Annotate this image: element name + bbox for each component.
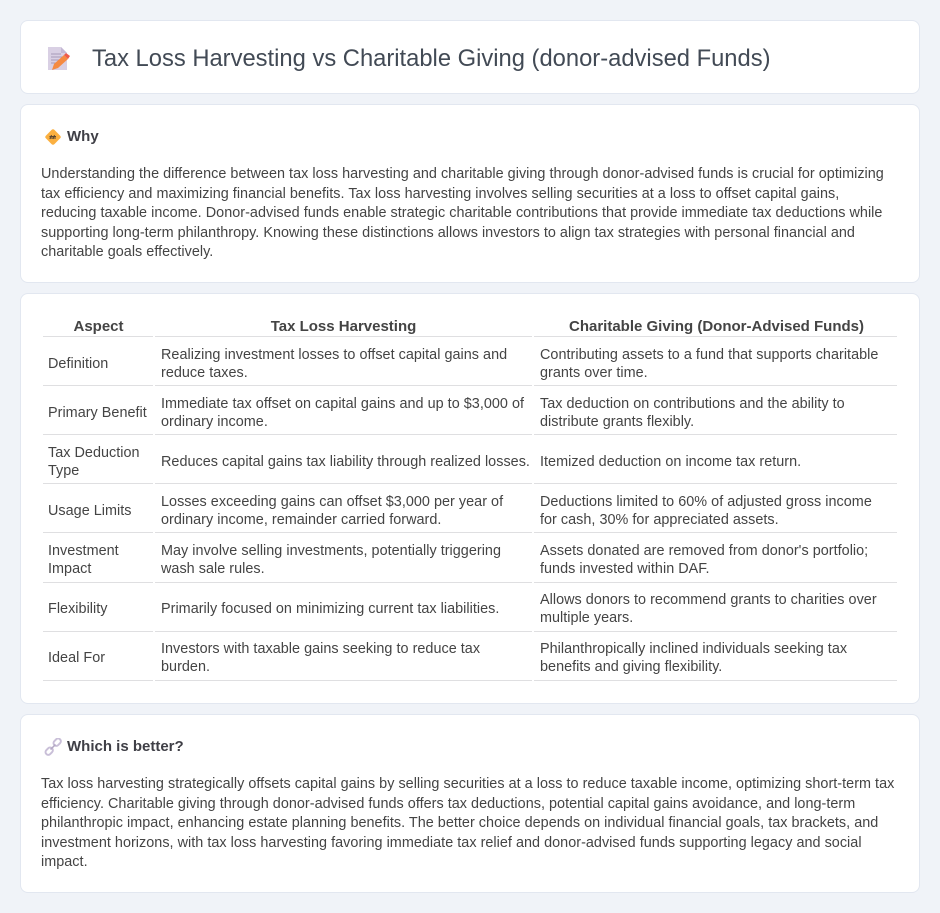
row: usage limits: Losses exceeding gains can offset $3,000 per year of xyxy=(161,494,503,510)
heading: why: Why xyxy=(67,128,99,145)
row: definition: reduce taxes. xyxy=(161,365,248,381)
row: tax deduction type: Itemized deduction on income tax return. xyxy=(540,454,801,470)
panel: title xyxy=(20,20,920,94)
row: tax deduction type: Reduces capital gains tax liability through realized losses. xyxy=(161,454,530,470)
row: investment impact: Investment xyxy=(48,543,119,559)
row: investment impact xyxy=(48,543,868,577)
row: ideal for: Philanthropically inclined individuals seeking tax xyxy=(540,641,847,657)
panel: why xyxy=(20,104,920,283)
text: why paragraph: Understanding the difference between tax loss harvesting and charitable giving through donor-advised funds is crucial for optimizing xyxy=(41,166,884,182)
heading: page title: Tax Loss Harvesting vs Charitable Giving (donor-advised Funds) xyxy=(92,45,770,72)
row: flexibility: multiple years. xyxy=(540,610,633,626)
text: why paragraph: supporting long-term philanthropy. Knowing these distinctions allows investors to align tax strategies with personal financial and xyxy=(41,224,855,240)
row: usage limits: ordinary income, remainder carried forward. xyxy=(161,512,441,528)
row: primary benefit: Tax deduction on contributions and the ability to xyxy=(540,396,845,412)
row: primary benefit: Primary Benefit xyxy=(48,405,147,421)
row: tax deduction type xyxy=(48,445,801,479)
row: flexibility: Flexibility xyxy=(48,601,108,617)
row: primary benefit xyxy=(48,396,845,430)
row: definition: Definition xyxy=(48,356,108,372)
table header: Charitable Giving (Donor-Advised Funds) xyxy=(569,318,864,335)
table header: Aspect xyxy=(73,318,124,335)
text: which is better paragraph: efficiency. Charitable giving through donor-advised funds offers tax deductions, potential capital gains avoidance, and long-term xyxy=(41,796,855,812)
row: investment impact: wash sale rules. xyxy=(161,561,265,577)
panel: comparison table xyxy=(20,293,920,704)
row: primary benefit: Immediate tax offset on capital gains and up to $3,000 of xyxy=(161,396,524,412)
table header: Tax Loss Harvesting xyxy=(271,318,416,335)
row: flexibility: Allows donors to recommend grants to charities over xyxy=(540,592,877,608)
row: flexibility xyxy=(48,592,877,626)
row: investment impact: May involve selling investments, potentially triggering xyxy=(161,543,501,559)
row: usage limits: Usage Limits xyxy=(48,503,132,519)
row: primary benefit: ordinary income. xyxy=(161,414,268,430)
icon: link xyxy=(44,738,62,756)
table header xyxy=(73,318,864,335)
row: usage limits: Deductions limited to 60% of adjusted gross income xyxy=(540,494,872,510)
text: which is better paragraph: investment horizons, with tax loss harvesting favoring immediate tax relief and donor-advised funds supporting legacy and social xyxy=(41,834,862,850)
row: usage limits xyxy=(48,494,872,528)
row: ideal for: Ideal For xyxy=(48,650,105,666)
text: why paragraph: charitable goals effectively. xyxy=(41,244,213,260)
text: which is better paragraph: impact. xyxy=(41,854,88,870)
text: which is better paragraph: philanthropic impact, enhancing estate planning benefits. The better choice depends on individual financial goals, tax brackets, and xyxy=(41,815,878,831)
row: ideal for: Investors with taxable gains seeking to reduce tax xyxy=(161,641,480,657)
row: definition: Realizing investment losses to offset capital gains and xyxy=(161,347,507,363)
icon: memo with pencil xyxy=(48,47,70,70)
row: definition: Contributing assets to a fund that supports charitable xyxy=(540,347,878,363)
text: which is better paragraph xyxy=(41,776,894,870)
row: investment impact: Impact xyxy=(48,561,91,577)
text: which is better paragraph: Tax loss harvesting strategically offsets capital gains by selling securities at a loss to reduce taxable income, optimizing short-term tax xyxy=(41,776,894,792)
row: investment impact: funds invested within DAF. xyxy=(540,561,710,577)
panel: which is better xyxy=(20,714,920,893)
row: ideal for xyxy=(48,641,847,675)
row: ideal for: benefits and giving flexibility. xyxy=(540,659,722,675)
row: ideal for: burden. xyxy=(161,659,210,675)
row: tax deduction type: Tax Deduction xyxy=(48,445,140,461)
row: flexibility: Primarily focused on minimizing current tax liabilities. xyxy=(161,601,499,617)
row: definition: grants over time. xyxy=(540,365,648,381)
text: why paragraph xyxy=(41,166,884,260)
text: why paragraph: tax efficiency and maximizing financial benefits. Tax loss harvesting involves selling securities at a loss to offset capital gains, xyxy=(41,186,839,202)
row: tax deduction type: Type xyxy=(48,463,79,479)
icon: warning diamond xyxy=(45,129,61,145)
heading: which is better: Which is better? xyxy=(67,738,184,755)
row: primary benefit: distribute grants flexibly. xyxy=(540,414,694,430)
row: investment impact: Assets donated are removed from donor's portfolio; xyxy=(540,543,868,559)
row: definition xyxy=(48,347,878,381)
text: why paragraph: reducing taxable income. Donor-advised funds enable strategic charitable contributions that provide immediate tax deductions while xyxy=(41,205,882,221)
row: usage limits: for cash, 30% for appreciated assets. xyxy=(540,512,779,528)
